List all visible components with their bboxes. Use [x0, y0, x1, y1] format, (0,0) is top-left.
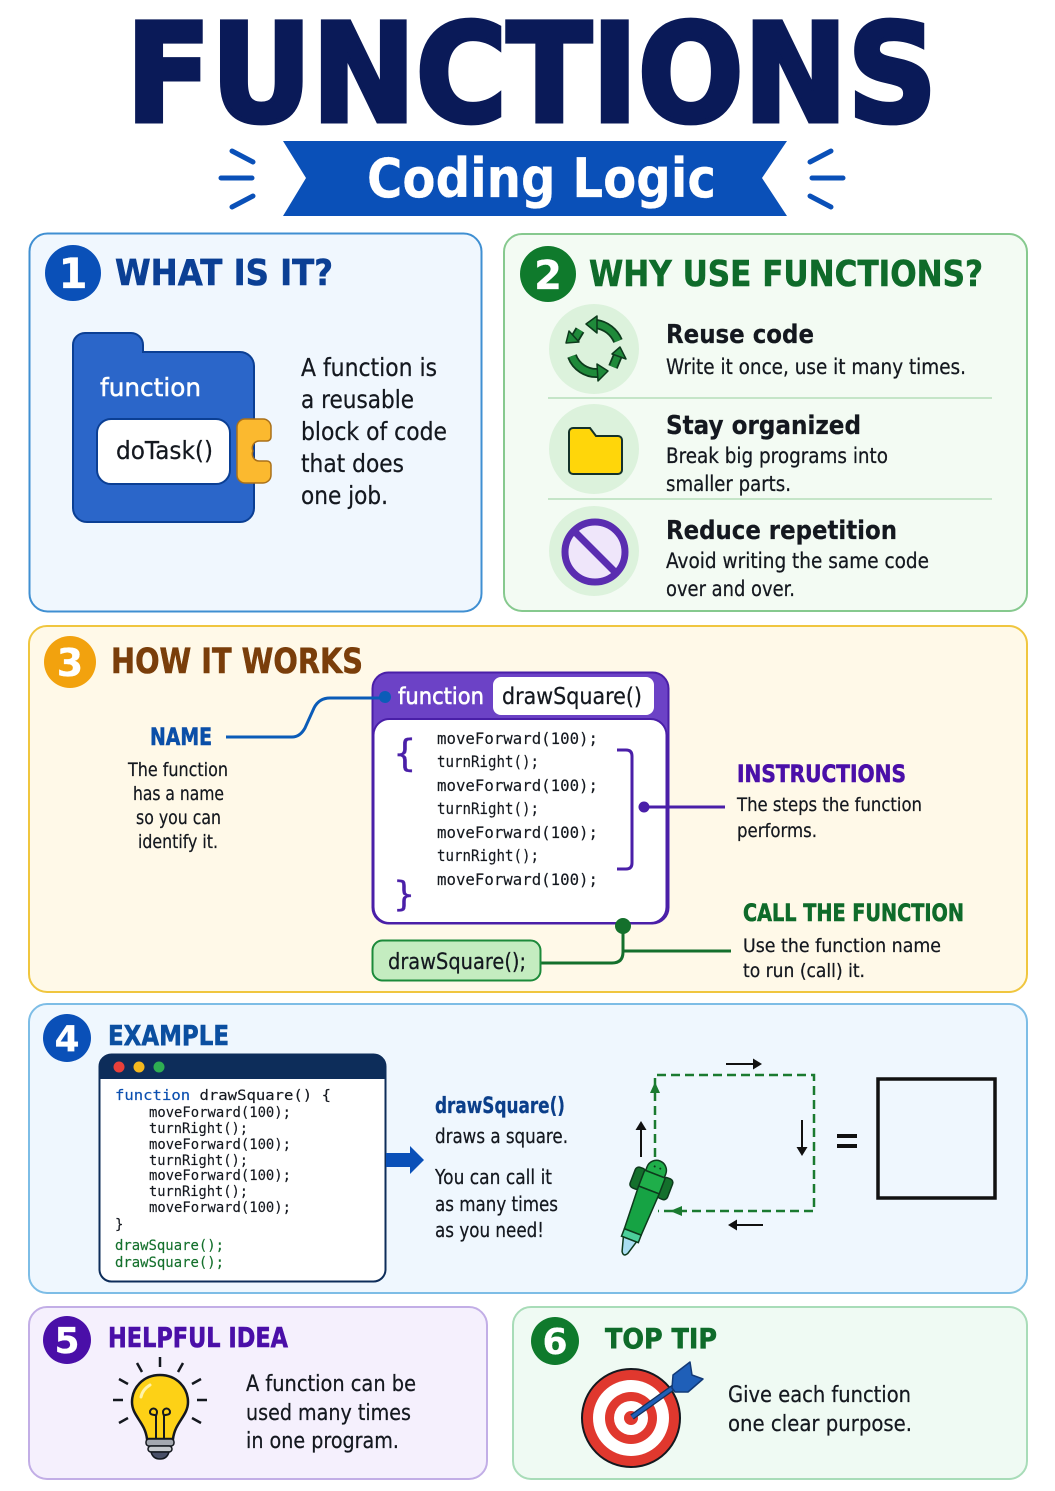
definition text: block of code	[301, 417, 447, 446]
helpful idea text: A function can be	[246, 1372, 416, 1397]
stay organized text: smaller parts.	[666, 472, 791, 496]
badge 6	[531, 1317, 579, 1365]
icon: folder	[549, 404, 639, 494]
instructions callout: performs.	[737, 820, 817, 842]
call the function callout: to run (call) it.	[743, 960, 865, 982]
badge 3	[44, 636, 96, 688]
function code card	[372, 672, 668, 924]
instructions callout: The steps the function	[736, 794, 922, 816]
example explanation: as you need!	[435, 1218, 544, 1242]
reuse code text: Reuse code	[666, 320, 814, 350]
call chip	[372, 940, 540, 980]
call chip: drawSquare();	[388, 950, 526, 975]
example explanation	[434, 1094, 568, 1242]
subtitle ribbon	[283, 141, 787, 216]
left burst	[221, 151, 253, 207]
reuse code text	[666, 320, 966, 379]
badge 5	[43, 1316, 91, 1364]
name connector	[226, 691, 391, 737]
function code card: {	[393, 732, 417, 775]
reduce repetition text: over and over.	[666, 577, 795, 601]
reduce repetition text: Reduce repetition	[666, 516, 897, 546]
name callout: so you can	[136, 807, 221, 829]
heading: top tip: TOP TIP	[605, 1322, 717, 1355]
instructions bracket	[617, 750, 725, 869]
code window: moveForward(100);	[149, 1168, 291, 1184]
example explanation: as many times	[435, 1192, 558, 1216]
function code card: drawSquare()	[502, 684, 642, 710]
call the function callout	[743, 899, 964, 982]
instructions callout	[736, 760, 922, 842]
icon: turtle pen	[605, 1154, 679, 1262]
stay organized text	[666, 411, 888, 496]
name callout	[127, 723, 228, 853]
call the function callout: CALL THE FUNCTION	[743, 899, 964, 927]
code window: drawSquare();	[115, 1238, 224, 1254]
heading: what is it: WHAT IS IT?	[115, 253, 333, 294]
right burst	[810, 151, 843, 207]
function block icon: doTask()	[116, 436, 213, 465]
call connector	[541, 918, 731, 963]
function code card: turnRight();	[437, 752, 539, 771]
stay organized text: Break big programs into	[666, 444, 888, 468]
icon: recycle arrows	[549, 304, 639, 394]
result square	[878, 1079, 995, 1198]
panel: what is it	[30, 234, 482, 612]
code window: }	[115, 1217, 123, 1233]
function code card: moveForward(100);	[437, 776, 598, 795]
function code card: }	[393, 875, 415, 915]
code window	[99, 1054, 386, 1282]
code window: turnRight();	[149, 1184, 248, 1200]
instructions callout: INSTRUCTIONS	[737, 760, 906, 788]
heading: why use functions: WHY USE FUNCTIONS?	[589, 254, 983, 295]
name callout: has a name	[133, 783, 224, 805]
top tip text: one clear purpose.	[728, 1412, 912, 1437]
function block icon: function	[100, 373, 201, 402]
icon: target and dart	[582, 1362, 703, 1467]
call the function callout: Use the function name	[743, 935, 941, 957]
heading: how it works: HOW IT WORKS	[111, 642, 363, 682]
badge 6: 6	[542, 1322, 568, 1363]
function code card: moveForward(100);	[437, 729, 598, 748]
function code card: moveForward(100);	[437, 870, 598, 889]
function code card: turnRight();	[437, 799, 539, 818]
function code card: turnRight();	[437, 846, 539, 865]
example explanation: drawSquare()	[435, 1094, 565, 1119]
name callout: The function	[127, 759, 228, 781]
example explanation: draws a square.	[435, 1124, 568, 1148]
code window: moveForward(100);	[149, 1200, 291, 1216]
code window: turnRight();	[149, 1121, 248, 1137]
code window: turnRight();	[149, 1153, 248, 1169]
function code card: function	[398, 684, 484, 710]
equals sign	[837, 1136, 857, 1146]
code window: function drawSquare() {	[115, 1088, 331, 1104]
code window: moveForward(100);	[149, 1105, 291, 1121]
top tip text: Give each function	[728, 1383, 911, 1408]
code window: drawSquare();	[115, 1255, 224, 1271]
badge 2: 2	[534, 253, 562, 299]
direction arrows	[636, 1058, 808, 1230]
code window: moveForward(100);	[149, 1137, 291, 1153]
badge 4: 4	[54, 1019, 80, 1060]
reduce repetition text	[666, 516, 929, 601]
arrow: code to result	[386, 1146, 424, 1174]
panel: top tip	[513, 1307, 1027, 1479]
panel: helpful idea	[29, 1307, 487, 1479]
helpful idea text: in one program.	[246, 1429, 399, 1454]
panel: why use functions	[504, 234, 1027, 611]
icon: no sign	[549, 506, 639, 596]
definition text: that does	[301, 449, 404, 478]
function block icon	[73, 333, 271, 522]
panel: example	[29, 1004, 1027, 1293]
badge 1	[45, 245, 101, 301]
icon: light bulb	[113, 1357, 207, 1459]
definition text: A function is	[301, 353, 437, 382]
badge 4	[43, 1014, 91, 1062]
reduce repetition text: Avoid writing the same code	[666, 549, 929, 573]
badge 3: 3	[57, 641, 83, 685]
definition text: a reusable	[301, 385, 414, 414]
example explanation: You can call it	[434, 1165, 552, 1189]
stay organized text: Stay organized	[666, 411, 861, 441]
top tip text	[728, 1383, 912, 1437]
name callout: identify it.	[138, 831, 218, 853]
function code card: moveForward(100);	[437, 823, 598, 842]
helpful idea text	[246, 1372, 416, 1454]
name callout: NAME	[150, 723, 212, 751]
badge 1: 1	[58, 249, 88, 298]
subtitle ribbon: Coding Logic	[367, 147, 716, 210]
panel: how it works	[29, 626, 1027, 992]
reuse code text: Write it once, use it many times.	[666, 355, 966, 379]
helpful idea text: used many times	[246, 1401, 411, 1426]
badge 5: 5	[54, 1321, 80, 1362]
dashed square path	[650, 1075, 814, 1216]
badge 2	[520, 246, 576, 302]
heading: helpful idea: HELPFUL IDEA	[108, 1321, 288, 1354]
definition text: one job.	[301, 481, 388, 510]
definition text	[301, 353, 447, 510]
title: FUNCTIONS	[126, 0, 937, 154]
heading: example: EXAMPLE	[108, 1019, 229, 1052]
